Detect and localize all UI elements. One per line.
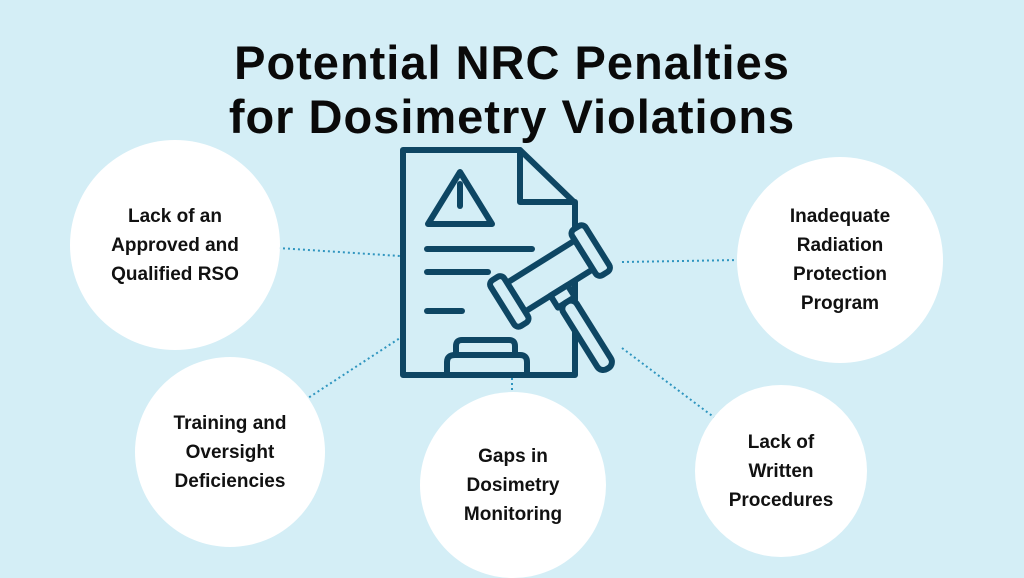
circle: radiation protection xyxy=(737,157,943,363)
circle: monitoring: Dosimetry xyxy=(467,474,559,496)
circle: radiation protection: Inadequate xyxy=(790,206,890,227)
circle: radiation protection: Radiation xyxy=(797,235,883,256)
circle: RSO: Lack of an xyxy=(128,206,222,226)
circle: procedures: Lack of xyxy=(748,432,814,452)
circle: training xyxy=(135,357,325,547)
circle: RSO: Qualified RSO xyxy=(111,264,239,284)
circle: training: Deficiencies xyxy=(175,470,285,492)
circle: monitoring: Gaps in xyxy=(478,446,548,466)
circle: monitoring: Monitoring xyxy=(464,504,562,524)
circle: radiation protection: Program xyxy=(801,293,879,314)
title: for Dosimetry Violations xyxy=(229,90,795,143)
title: Potential NRC Penalties xyxy=(234,36,790,89)
circle: RSO: Approved and xyxy=(111,234,239,256)
title xyxy=(229,36,795,143)
circle: RSO xyxy=(70,140,280,350)
circle: training: Training and xyxy=(174,412,286,434)
circle: monitoring xyxy=(420,392,606,578)
circle: procedures xyxy=(695,385,867,557)
circle: procedures: Written xyxy=(748,460,814,482)
circle: training: Oversight xyxy=(186,442,274,462)
circle: radiation protection: Protection xyxy=(793,264,887,285)
circle: procedures: Procedures xyxy=(729,490,833,510)
